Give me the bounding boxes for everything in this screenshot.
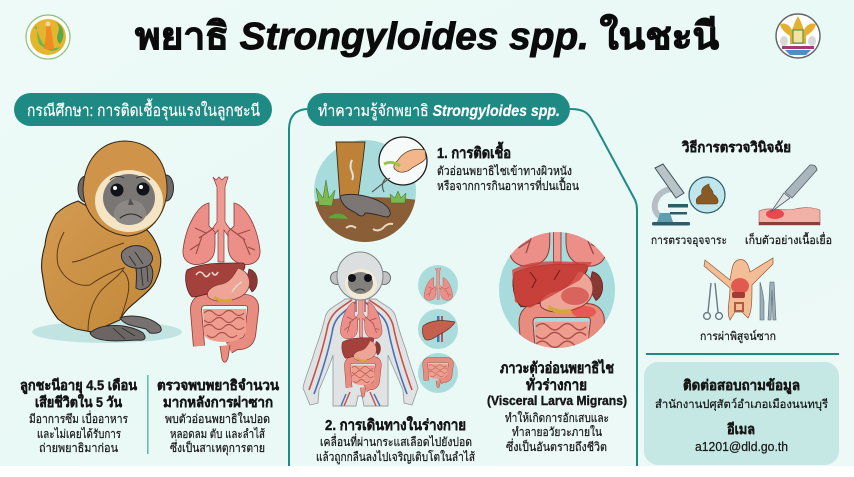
- text: gibbon age and death: [20, 377, 137, 455]
- panel: contact box: ติดต่อสอบถามข้อมูล: [683, 377, 800, 394]
- text: necropsy finding: ตรวจพบพยาธิจำนวน: [157, 377, 279, 393]
- right logo: provincial emblem: [776, 14, 820, 58]
- heading pill: case study: กรณีศึกษา: การติดเชื้อรุนแรงในลูกชะนี: [27, 98, 260, 121]
- panel: case study: [14, 93, 279, 456]
- icon: necropsy with instruments: [704, 258, 776, 320]
- text: visceral larva migrans: (Visceral Larva Migrans): [487, 393, 627, 408]
- illustration: infection through skin: [314, 137, 427, 245]
- text: step 2 migration: แล้วถูกกลืนลงไปเจริญเติบโตในลำไส้: [316, 450, 476, 465]
- text: necropsy finding: หลอดลม ตับ และลำไส้: [170, 427, 266, 441]
- heading pill: about the parasite: [307, 93, 570, 126]
- text: visceral larva migrans: ทำให้เกิดการอักเสบและ: [505, 411, 609, 425]
- panel: about the parasite: [289, 93, 637, 466]
- text: step 2 migration: 2. การเดินทางในร่างกาย: [325, 416, 466, 434]
- text: necropsy finding: ซึ่งเป็นสาเหตุการตาย: [170, 439, 265, 456]
- text: step 1 infection: หรือจากการกินอาหารที่ปนเปื้อน: [437, 177, 579, 193]
- text: gibbon age and death: และไม่เคยได้รับการ: [37, 427, 121, 441]
- text: necropsy finding: พบตัวอ่อนพยาธิในปอด: [165, 412, 270, 426]
- text: step 1 infection: 1. การติดเชื้อ: [437, 141, 511, 162]
- text: necropsy finding: มากหลังการผ่าซาก: [163, 394, 273, 410]
- text: gibbon age and death: เสียชีวิตใน 5 วัน: [35, 393, 122, 410]
- text: necropsy finding: [157, 377, 279, 456]
- text: step 1 infection: [437, 141, 579, 193]
- heading pill: case study: [14, 93, 272, 126]
- text: gibbon age and death: ลูกชะนีอายุ 4.5 เดือน: [20, 377, 137, 394]
- text: visceral larva migrans: ภาวะตัวอ่อนพยาธิไช: [500, 358, 614, 377]
- illustration: inflamed organs in circle: [499, 232, 615, 348]
- panel: contact box: a1201@dld.go.th: [695, 440, 788, 454]
- text: visceral larva migrans: ทั่วร่างกาย: [526, 374, 587, 394]
- text: gibbon age and death: ถ่ายพยาธิมาก่อน: [39, 441, 118, 455]
- text: visceral larva migrans: [487, 358, 627, 454]
- icon: scalpel and tissue sample: [759, 165, 820, 225]
- heading: diagnosis: วิธีการตรวจวินิจฉัย: [681, 139, 791, 155]
- left logo: department emblem: [26, 15, 70, 59]
- title: พยาธิ Strongyloides spp. ในชะนี: [135, 14, 719, 58]
- text: gibbon age and death: มีอาการซึม เบื่ออาหาร: [29, 410, 128, 426]
- panel: contact box: สำนักงานปศุสัตว์อำเภอเมืองนนทบุรี: [655, 397, 828, 411]
- text: visceral larva migrans: ทำลายอวัยวะภายใน: [512, 425, 602, 439]
- inset: hand with contaminated food: [379, 137, 427, 185]
- text: stool and tissue labels: เก็บตัวอย่างเนื้อเยื่อ: [745, 232, 832, 247]
- text: stool and tissue labels: การตรวจอุจจาระ: [651, 235, 727, 247]
- panel: contact box: [644, 362, 839, 465]
- icon: intestine in circle: [418, 353, 458, 393]
- gibbon head: [78, 141, 174, 236]
- text: step 2 migration: เคลื่อนที่ผ่านกระแสเลือดไปยังปอด: [320, 433, 472, 449]
- illustration: infected organs: [183, 177, 260, 362]
- illustration: sad baby gibbon: [32, 141, 182, 343]
- icon: liver in circle: [418, 309, 458, 349]
- heading pill: about the parasite: ทำความรู้จักพยาธิ Strongyloides spp.: [318, 102, 560, 121]
- panel: diagnosis methods: [651, 139, 832, 343]
- text: necropsy label: การผ่าพิสูจน์ซาก: [700, 329, 776, 343]
- panel: contact box: อีเมล: [726, 421, 755, 437]
- text: stool and tissue labels: [651, 232, 832, 247]
- text: visceral larva migrans: ซึ่งเป็นอันตรายถึงชีวิต: [506, 438, 607, 454]
- illustration: gibbon body with migration route: [303, 252, 418, 406]
- text: step 1 infection: ตัวอ่อนพยาธิไชเข้าทางผิวหนัง: [437, 164, 572, 178]
- icon: lungs in circle: [418, 265, 458, 305]
- text: step 2 migration: [316, 416, 476, 465]
- icon: microscope with stool sample: [652, 164, 725, 226]
